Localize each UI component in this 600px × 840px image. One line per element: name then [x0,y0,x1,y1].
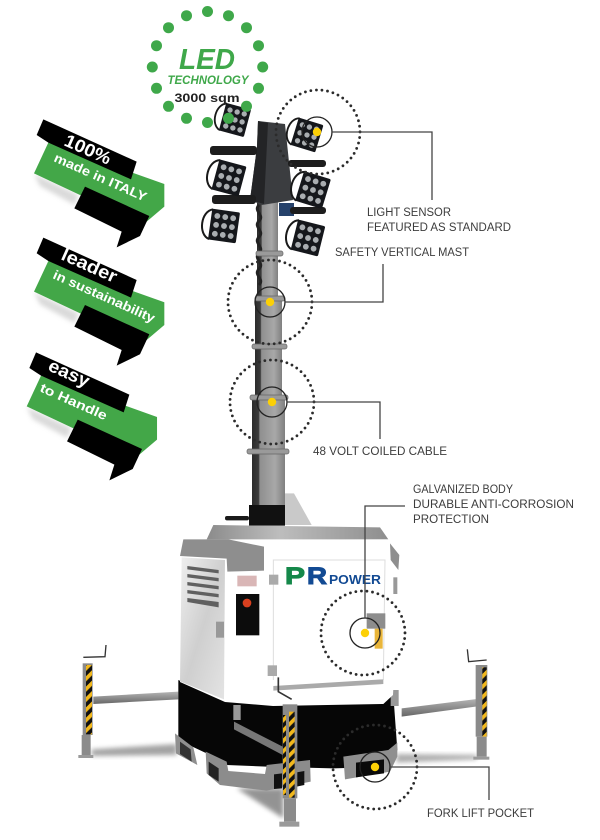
ribbon: easy to Handle [27,352,157,480]
logo: PR Power: P [285,563,305,590]
callout: safety vertical mast: SAFETY VERTICAL MAST [335,247,469,259]
logo: PR Power: POWER [329,572,382,587]
panel: front jack [278,677,299,827]
icon: lamp 5 [200,208,240,243]
ribbon: 100% made in Italy: made in ITALY [52,150,150,205]
callout: galvanized body: PROTECTION [413,514,489,526]
icon: lamp 2 [283,115,323,152]
badge: LED technology: TECHNOLOGY [168,75,250,87]
ribbon: 100% made in Italy [34,119,164,247]
badge: LED technology [147,6,268,128]
panel: generator body [180,493,400,706]
ribbon: easy to Handle: easy [45,355,93,391]
callout: coiled cable [230,360,447,458]
callout: fork lift pocket: FORK LIFT POCKET [427,808,534,820]
panel: mast [247,195,289,506]
logo: PR Power [285,563,382,590]
icon: left jack [78,645,106,758]
panel: outriggers and base [78,645,489,818]
callout: galvanized body [321,484,574,675]
icon: lamp 3 [204,157,247,197]
icon: lamp 4 [287,169,331,209]
callout: light sensor: LIGHT SENSOR [367,207,451,219]
badge: LED technology: LED [179,44,235,76]
icon: lamp 1 [212,101,251,137]
badge: LED technology: 3000 sqm [174,91,240,105]
icon: lamp 6 [283,218,325,256]
logo: PR Power: R [307,563,327,590]
icon: right jack [467,649,489,760]
callout: light sensor [276,90,511,234]
callout: fork lift pocket [333,725,534,820]
ribbon: leader in sustainability: leader [58,244,120,287]
ribbon: leader in sustainability: in sustainability [51,267,158,326]
callout: galvanized body: DURABLE ANTI-CORROSION [413,499,574,511]
panel: light head [200,101,331,256]
callout: coiled cable: 48 VOLT COILED CABLE [313,446,447,458]
callout: safety vertical mast [228,247,469,344]
ribbon: leader in sustainability [34,238,164,366]
ribbon: 100% made in Italy: 100% [61,130,114,169]
ribbon: easy to Handle: to Handle [38,380,110,423]
callout: galvanized body: GALVANIZED BODY [413,484,513,496]
callout: light sensor: FEATURED AS STANDARD [367,222,511,234]
